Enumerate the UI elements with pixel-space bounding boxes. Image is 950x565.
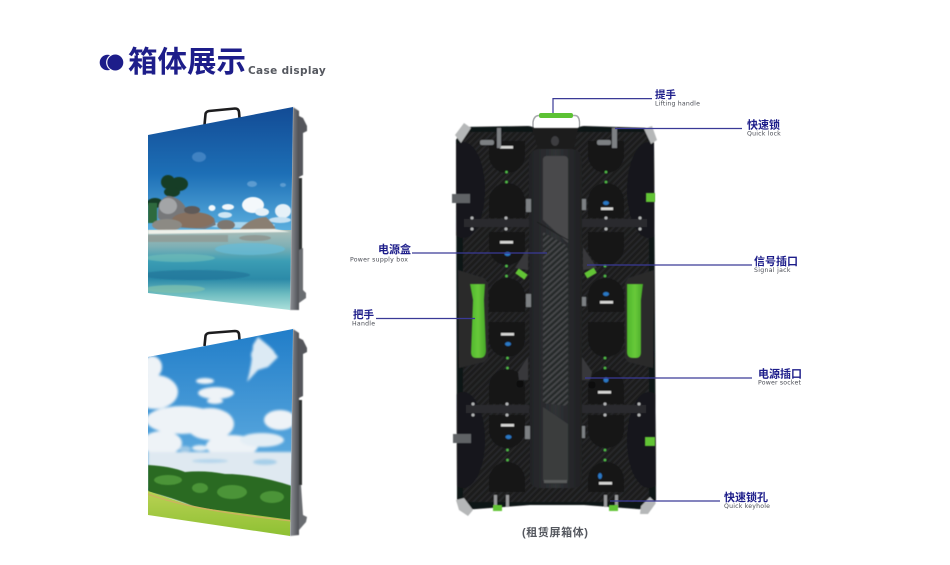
callout: quick keyhole bbox=[610, 490, 770, 510]
callout: quick lock: 快速锁 bbox=[747, 118, 780, 132]
caption: (租赁屏箱体) bbox=[522, 525, 589, 539]
callout: quick keyhole: Quick keyhole bbox=[724, 503, 770, 510]
callout: handle: 把手 bbox=[353, 308, 374, 321]
bar bolts bbox=[470, 216, 642, 416]
cabinet body bbox=[441, 123, 671, 516]
bottom locks bbox=[494, 495, 618, 507]
top lifting handle bbox=[533, 113, 580, 128]
side frame bbox=[290, 107, 307, 310]
carry handle bbox=[204, 331, 240, 346]
callout: lifting handle: Lifting handle bbox=[655, 100, 700, 108]
corner brackets bbox=[455, 123, 657, 516]
tree line bbox=[148, 465, 292, 522]
module pads left bbox=[489, 141, 624, 492]
callout: signal jack bbox=[587, 254, 798, 274]
small clips bbox=[480, 128, 617, 439]
beach sand bbox=[148, 229, 290, 234]
callout: lifting handle: 提手 bbox=[655, 88, 676, 101]
top centre bracket bbox=[532, 128, 578, 149]
palm tree bbox=[147, 175, 188, 208]
side locks bbox=[452, 194, 471, 443]
module pads right bbox=[588, 141, 624, 173]
carry handle bbox=[204, 108, 240, 125]
callout: quick keyhole: 快速锁孔 bbox=[724, 490, 768, 504]
callout: power socket: 电源插口 bbox=[758, 366, 802, 380]
callout: quick lock bbox=[615, 118, 781, 138]
green latches bbox=[493, 193, 655, 511]
handle recesses bbox=[458, 270, 488, 368]
callout: lifting handle bbox=[553, 88, 700, 113]
grass field bbox=[148, 491, 292, 540]
LED cabinet with landscape image bbox=[148, 328, 308, 536]
rear view of rental cabinet bbox=[451, 113, 658, 516]
rocks bbox=[158, 196, 216, 229]
callout: power supply box: Power supply box bbox=[350, 256, 408, 264]
section heading bbox=[100, 46, 326, 79]
status dots bbox=[505, 171, 607, 461]
callout: signal jack: Signal jack bbox=[754, 267, 791, 274]
icon: overlapping circles bbox=[100, 54, 124, 71]
green side handles bbox=[470, 284, 643, 358]
callout: power supply box: 电源盒 bbox=[378, 242, 411, 256]
landscape photo bbox=[148, 329, 293, 536]
callout: handle bbox=[352, 308, 475, 328]
callout: handle: Handle bbox=[352, 320, 375, 328]
LED cabinet with beach image bbox=[140, 105, 307, 312]
blue sockets bbox=[504, 201, 609, 479]
white labels bbox=[500, 146, 613, 484]
subtitle: Case display bbox=[248, 65, 326, 77]
cross bars bbox=[464, 219, 647, 413]
side curved recesses bbox=[456, 142, 656, 488]
title: 箱体展示 bbox=[128, 46, 246, 79]
callout: quick lock: Quick lock bbox=[747, 130, 781, 138]
socket wedges bbox=[515, 247, 597, 380]
socket connectors bbox=[516, 380, 596, 388]
beach photo bbox=[140, 105, 295, 312]
callout: signal jack: 信号插口 bbox=[754, 254, 798, 268]
callout: power socket bbox=[585, 366, 802, 386]
callout: power supply box bbox=[350, 242, 547, 264]
centre spine bbox=[529, 149, 582, 488]
side frame bbox=[290, 329, 307, 536]
callout: power socket: Power socket bbox=[758, 380, 801, 386]
